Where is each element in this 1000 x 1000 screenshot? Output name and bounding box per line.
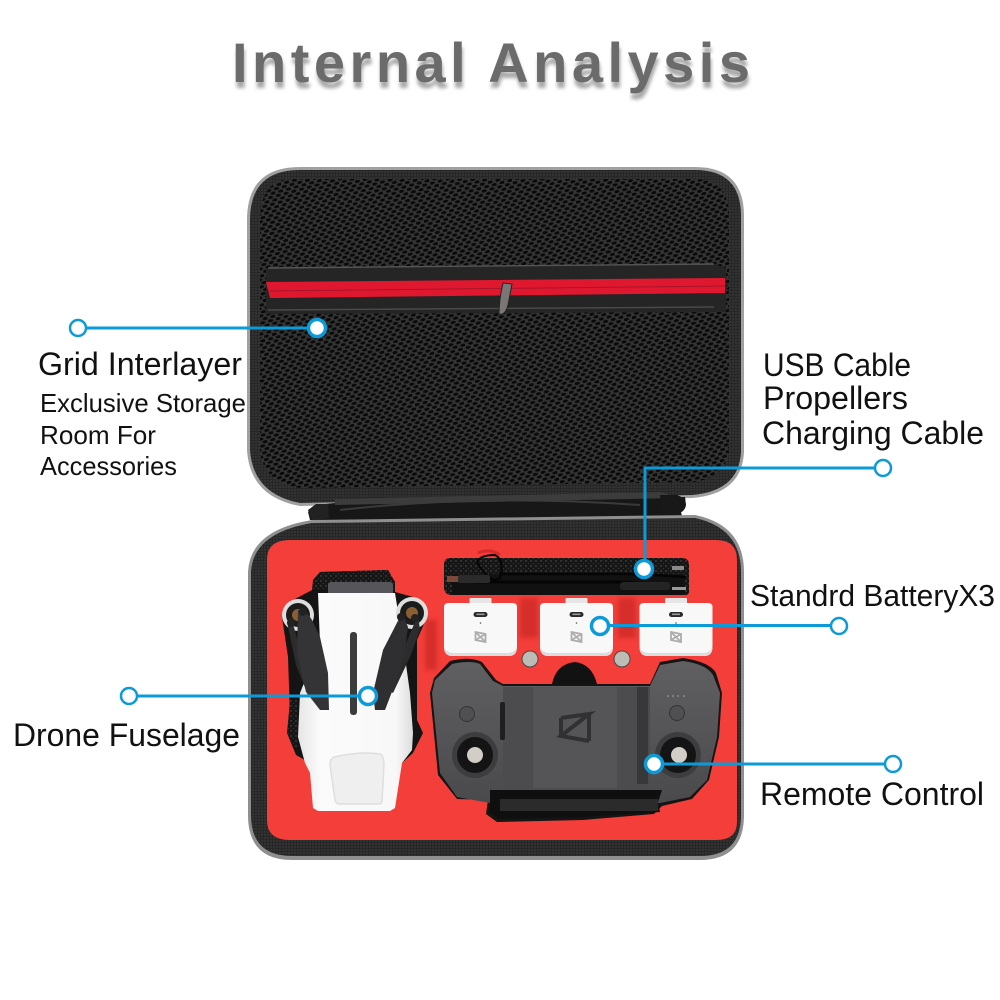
title: Internal Analysis: [233, 37, 751, 100]
drone cutout and fuselage: [282, 570, 428, 811]
label: grid interlayer: Room For: [40, 420, 156, 450]
label: cables and propellers: Charging Cable: [762, 415, 984, 451]
zipper pull: [499, 283, 512, 314]
pocket band: [266, 264, 726, 314]
grip cutout: [552, 662, 597, 684]
foam shadows: [425, 598, 636, 670]
callout: drone: [121, 688, 376, 704]
callout: battery: [592, 618, 847, 634]
callout: remote: [646, 756, 901, 772]
cable compartment: [444, 551, 689, 595]
label: cables and propellers: [762, 347, 984, 451]
label: drone: Drone Fuselage: [13, 717, 240, 753]
battery spacers: [522, 651, 538, 667]
buttons: [460, 706, 474, 722]
rear arms and propellers: [282, 597, 428, 710]
callout: grid interlayer: [70, 320, 326, 336]
callout: cables: [636, 460, 891, 578]
title: Internal Analysis: [232, 31, 750, 94]
logo: [561, 714, 589, 741]
red foam: [267, 540, 737, 840]
label: grid interlayer: Exclusive Storage: [40, 388, 246, 418]
batteries: [444, 598, 712, 667]
label: battery: Standrd BatteryX3: [750, 578, 995, 613]
case lid with mesh: [247, 167, 744, 506]
remote controller: [430, 658, 722, 822]
label: cables and propellers: USB Cable: [763, 347, 911, 383]
label: grid interlayer: Accessories: [40, 451, 177, 481]
fuselage: [298, 593, 413, 811]
right stick: [655, 732, 701, 778]
label: cables and propellers: Propellers: [763, 380, 908, 416]
red zipper: [266, 278, 725, 298]
left stick: [452, 732, 498, 778]
hinge: [308, 492, 686, 521]
case base: [248, 515, 744, 860]
label: grid interlayer: [38, 346, 246, 481]
label: remote: Remote Control: [760, 776, 984, 812]
label: grid interlayer: Grid Interlayer: [38, 346, 242, 382]
